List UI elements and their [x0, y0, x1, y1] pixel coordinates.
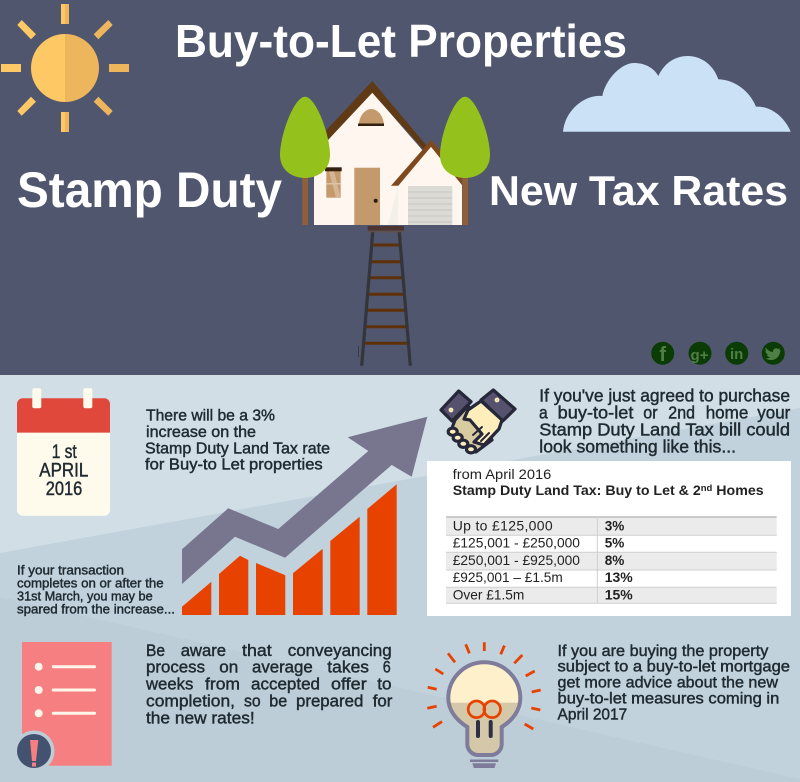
- text: mortgage advice: subject to a buy-to-let mortgage: [558, 659, 790, 676]
- icon: handshake: [441, 390, 515, 453]
- heading: stamp duty: Stamp Duty: [17, 162, 282, 218]
- text: conveyancing advice: that: [242, 641, 272, 660]
- text: conveyancing advice: Be: [146, 641, 165, 660]
- text: agreed to purchase: If you've just agreed to purchase: [539, 386, 790, 406]
- text: agreed to purchase: [539, 386, 790, 457]
- text: agreed to purchase: home: [706, 402, 748, 422]
- icon: light bulb: [427, 642, 541, 768]
- text: mortgage advice: [558, 643, 790, 724]
- panel: rates table: nd: [701, 483, 713, 494]
- panel: rates table: Homes: [712, 483, 764, 499]
- icon: sun: [1, 4, 129, 132]
- text: mortgage advice: If you are buying the property: [558, 643, 768, 660]
- panel: rates table: £125,001 - £250,000: [453, 535, 580, 551]
- text: 3% increase: There will be a 3%: [146, 408, 275, 425]
- text: conveyancing advice: to: [377, 675, 392, 694]
- text: conveyancing advice: from: [205, 675, 240, 694]
- text: agreed to purchase: your: [757, 402, 790, 422]
- text: transaction note: If your transaction: [17, 563, 124, 578]
- text: agreed to purchase: a: [539, 402, 548, 422]
- panel: rates table: Over £1.5m: [453, 586, 524, 602]
- text: agreed to purchase: buy-to-let: [558, 402, 634, 422]
- panel: rates table: 13%: [605, 569, 633, 585]
- text: transaction note: spared from the increase...: [17, 601, 175, 616]
- panel: rates table: £250,001 - £925,000: [453, 552, 580, 568]
- calendar: 1st April 2016: [17, 388, 110, 516]
- text: conveyancing advice: accepted: [251, 675, 320, 694]
- text: transaction note: completes on or after the: [17, 575, 164, 590]
- text: transaction note: [17, 563, 175, 616]
- text: conveyancing advice: offer: [331, 675, 367, 694]
- text: conveyancing advice: so: [244, 692, 261, 711]
- text: conveyancing advice: on: [219, 658, 238, 677]
- text: conveyancing advice: completion,: [146, 692, 235, 711]
- title: Buy-to-Let Properties: [175, 15, 627, 67]
- panel: rates table: [427, 461, 791, 616]
- text: conveyancing advice: 6: [383, 658, 391, 677]
- panel: rates table: 3%: [605, 518, 625, 534]
- social icons: f: [659, 344, 666, 366]
- icon: cloud: [563, 56, 791, 132]
- panel: rates table: Stamp Duty Land Tax: Buy to Let & 2: [453, 483, 701, 499]
- illustration: tree house: [280, 81, 490, 366]
- text: agreed to purchase: or: [643, 402, 658, 422]
- bar chart: [182, 484, 397, 615]
- text: conveyancing advice: weeks: [145, 675, 193, 694]
- text: 3% increase: [145, 408, 330, 473]
- text: 3% increase: increase on the: [146, 424, 256, 441]
- heading: new tax rates: New Tax Rates: [489, 167, 788, 214]
- panel: rates table: £925,001 – £1.5m: [453, 569, 563, 585]
- text: conveyancing advice: conveyancing: [288, 641, 392, 660]
- calendar: 1st April 2016: 1 st: [52, 442, 77, 463]
- text: agreed to purchase: look something like this...: [539, 437, 736, 457]
- calendar: 1st April 2016: 2016: [46, 479, 82, 500]
- social icons: in: [730, 346, 743, 363]
- text: conveyancing advice: process: [146, 658, 205, 677]
- text: conveyancing advice: be: [269, 692, 287, 711]
- text: mortgage advice: April 2017: [558, 707, 627, 724]
- text: conveyancing advice: the new rates!: [146, 708, 255, 727]
- text: mortgage advice: buy-to-let measures coming in: [558, 691, 779, 708]
- text: mortgage advice: get more advice about the new: [558, 675, 778, 692]
- chart arrow: [182, 417, 427, 584]
- text: conveyancing advice: for: [373, 692, 393, 711]
- text: 3% increase: for Buy-to Let properties: [145, 456, 323, 473]
- social icons: [651, 342, 785, 366]
- text: transaction note: 31st March, you may be: [17, 589, 153, 604]
- text: conveyancing advice: prepared: [296, 692, 363, 711]
- panel: rates table: 5%: [605, 535, 625, 551]
- text: conveyancing advice: takes: [327, 658, 369, 677]
- text: agreed to purchase: 2nd: [668, 402, 695, 422]
- panel: rates table: 15%: [605, 586, 633, 602]
- icon: checklist warning: [14, 642, 112, 772]
- text: 3% increase: Stamp Duty Land Tax rate: [145, 440, 330, 457]
- calendar: 1st April 2016: APRIL: [39, 461, 88, 482]
- social icons: g+: [691, 347, 709, 364]
- text: conveyancing advice: [145, 641, 393, 727]
- text: agreed to purchase: Stamp Duty Land Tax bill could: [539, 420, 790, 440]
- text: conveyancing advice: average: [252, 658, 313, 677]
- text: conveyancing advice: aware: [181, 641, 226, 660]
- panel: rates table: Up to £125,000: [453, 518, 553, 534]
- panel: rates table: 8%: [605, 552, 625, 568]
- panel: rates table: from April 2016: [453, 466, 552, 482]
